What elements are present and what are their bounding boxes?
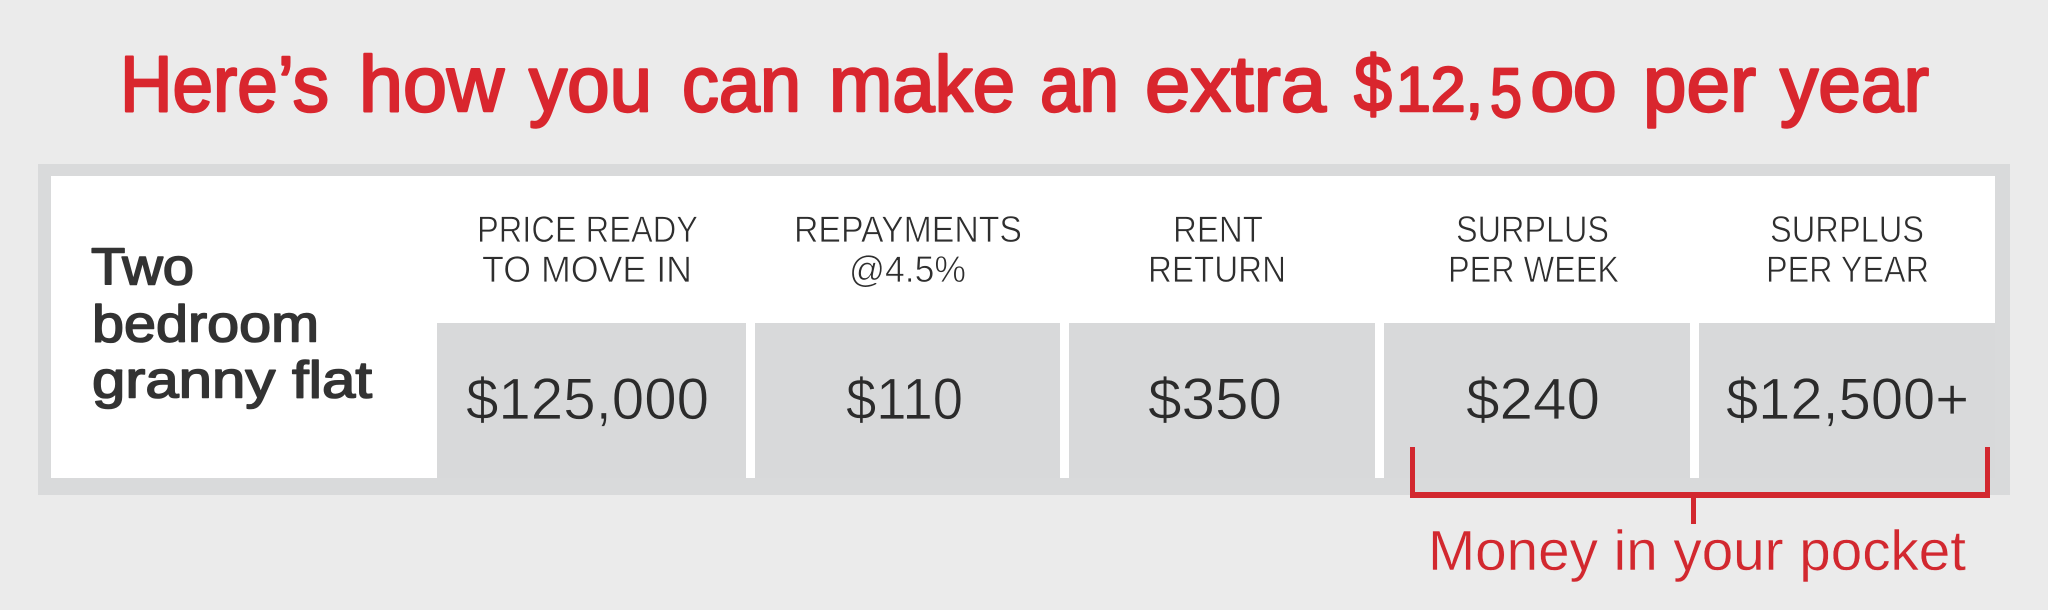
column: rent return: RENT <box>1173 209 1263 250</box>
title: extra <box>1145 39 1326 128</box>
table white background <box>51 176 1995 478</box>
column: rent return <box>1069 209 1375 478</box>
column: repayments: @4.5% <box>849 249 966 290</box>
column: rent return: $350 <box>1148 367 1282 432</box>
row label: two bedroom granny flat: bedroom <box>92 296 319 354</box>
row label: two bedroom granny flat: granny flat <box>92 352 373 410</box>
title: $ <box>1354 39 1392 128</box>
title: make <box>829 39 1015 128</box>
column: surplus per year: $12,500+ <box>1726 367 1969 432</box>
column: surplus per week: SURPLUS <box>1456 209 1609 250</box>
column: rent return: RETURN <box>1148 249 1286 290</box>
title: an <box>1040 39 1119 128</box>
title: you <box>529 39 652 128</box>
bracket: money in your pocket <box>1410 447 1990 524</box>
row label: two bedroom granny flat: Two <box>91 238 194 296</box>
column: price ready to move in: $125,000 <box>466 367 709 432</box>
title: how <box>359 39 505 128</box>
column: repayments: REPAYMENTS <box>794 209 1022 250</box>
row label: two bedroom granny flat <box>91 238 373 410</box>
column: repayments <box>755 209 1060 478</box>
title: 5 <box>1490 54 1522 132</box>
column: surplus per week: PER WEEK <box>1448 249 1619 290</box>
column: price ready to move in: TO MOVE IN <box>482 249 692 290</box>
column: surplus per year <box>1699 209 1995 478</box>
column: surplus per week: $240 <box>1466 367 1600 432</box>
title: 00 <box>1531 60 1616 123</box>
title: year <box>1780 39 1929 128</box>
column: price ready to move in <box>437 209 746 478</box>
table frame <box>38 164 2010 495</box>
panel: pricing table <box>38 164 2010 495</box>
title: per <box>1643 39 1756 128</box>
title: can <box>682 39 801 128</box>
column: surplus per year: SURPLUS <box>1770 209 1924 250</box>
column: surplus per year: PER YEAR <box>1766 249 1929 290</box>
title: 12, <box>1396 55 1483 125</box>
title: Here’s <box>120 39 329 128</box>
callout: money in your pocket: Money in your pocket <box>1428 519 1966 583</box>
column: repayments: $110 <box>846 367 963 432</box>
column: surplus per week <box>1384 209 1690 478</box>
column: price ready to move in: PRICE READY <box>477 209 698 250</box>
